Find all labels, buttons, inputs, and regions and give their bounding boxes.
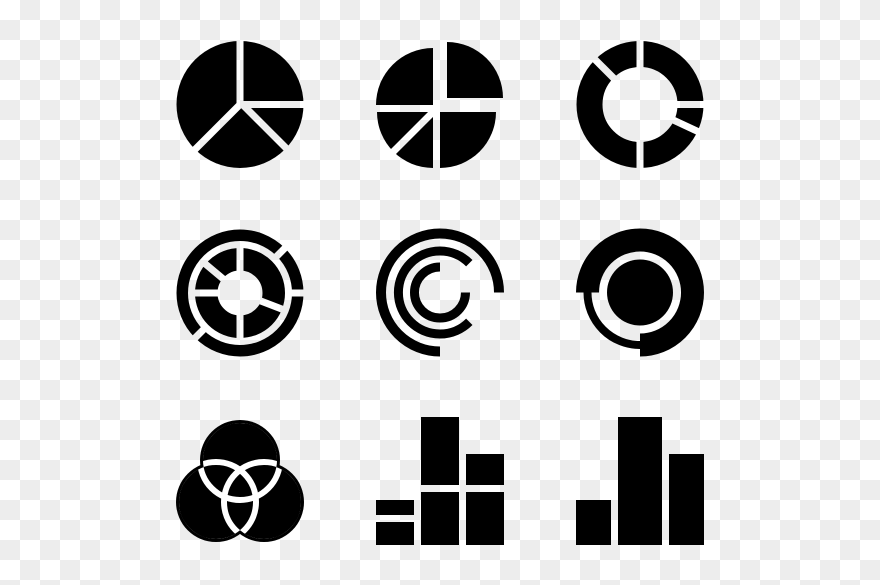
icon: segmented donut chart (590, 54, 690, 155)
icon: concentric arcs (381, 234, 499, 352)
icon: stacked bar chart (376, 417, 504, 545)
icon: venn diagram (176, 420, 304, 542)
icon: exploded pie chart (376, 42, 503, 168)
icon: pie chart three slices (176, 41, 304, 168)
icon: ring and donut chart (182, 235, 298, 351)
icon: bar chart (576, 417, 704, 545)
icon: radial progress (588, 240, 692, 345)
